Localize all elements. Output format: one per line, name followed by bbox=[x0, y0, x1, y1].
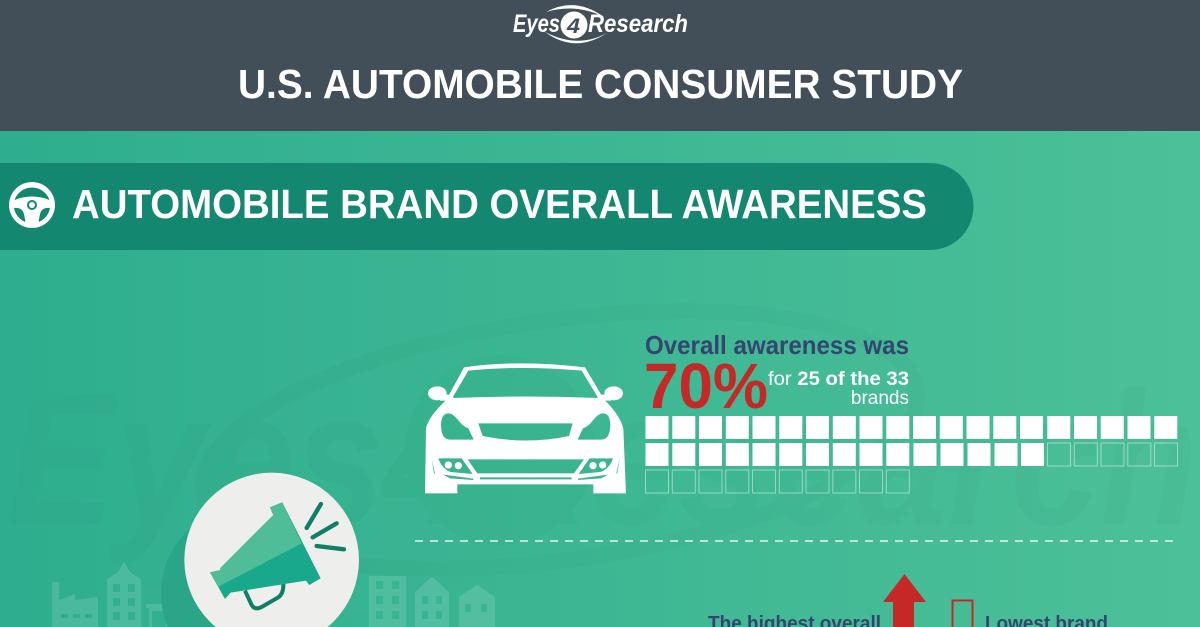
panel: header band bbox=[0, 0, 1200, 131]
logo: Research bbox=[588, 10, 688, 38]
text: for 25 of the 33 brands: brands bbox=[851, 388, 909, 409]
panel: section heading bar bbox=[0, 163, 974, 250]
heading: overall awareness: Overall awareness was bbox=[645, 330, 909, 360]
logo bbox=[513, 5, 688, 43]
section heading text: AUTOMOBILE BRAND OVERALL AWARENESS bbox=[72, 181, 927, 227]
icon: red up arrow bbox=[883, 574, 926, 627]
logo: 4 bbox=[566, 15, 580, 38]
skyline: left buildings bbox=[52, 562, 181, 627]
big number: 70%: 70% bbox=[644, 350, 768, 422]
icon: red outline bar bbox=[952, 600, 972, 627]
icon: steering wheel bbox=[9, 182, 55, 228]
text: for 25 of the 33 brands: for 25 of the 33 bbox=[768, 369, 909, 390]
skyline: right buildings bbox=[369, 576, 495, 627]
logo: Eyes bbox=[513, 10, 560, 38]
icon: megaphone in circle bbox=[161, 473, 359, 627]
title: U.S. AUTOMOBILE CONSUMER STUDY bbox=[238, 61, 963, 107]
panel: green background bbox=[0, 131, 1200, 627]
background watermark bbox=[8, 271, 1198, 609]
icon: car front view bbox=[425, 363, 626, 493]
text: for 25 of the 33 brands bbox=[768, 369, 909, 409]
pictogram: 35 of 50 squares filled bbox=[646, 416, 1178, 493]
